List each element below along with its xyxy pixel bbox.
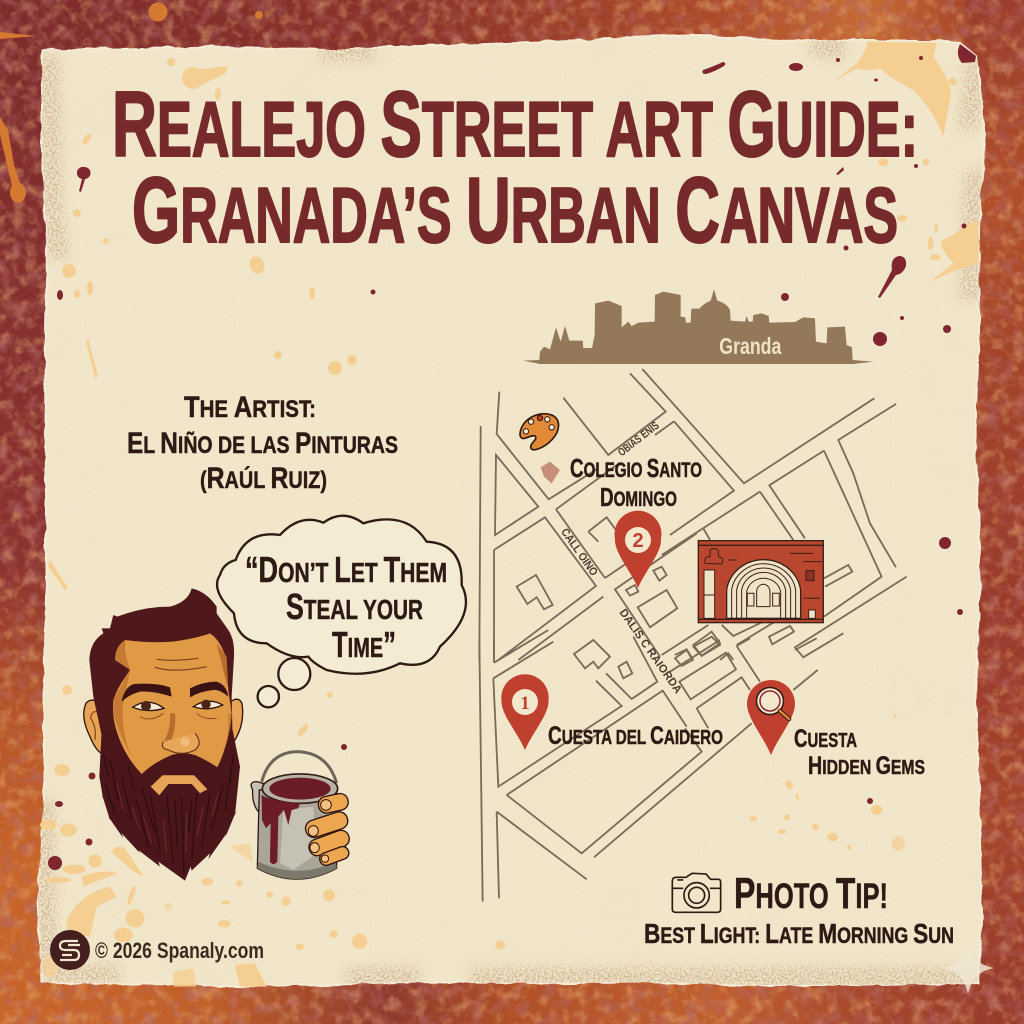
photo tip [644,869,954,949]
top left dots [182,67,204,89]
photo tip: PHOTO TIP! [734,869,888,918]
credit with logo: © 2026 Spanaly.com [95,938,264,963]
sparkle mark [942,944,994,994]
street name labels: CALL OINO [558,526,600,579]
artist heading: THE ARTIST: [184,391,316,424]
label: Cuesta Hidden Gems: CUESTA [794,725,857,753]
icon: faded building mark [541,462,560,483]
label: Cuesta del Caidero: CUESTA DEL CAIDERO [548,722,723,750]
bottom left splash [40,820,367,987]
street name labels: OBIAS ENIS [616,420,662,459]
hair [89,588,234,740]
forehead lines [155,658,207,670]
street map [479,369,907,902]
hand fingers [303,792,352,867]
face shading [113,640,232,767]
pin 1 with label [501,674,723,750]
label: Colegio Santo Domingo: COLEGIO SANTO [570,453,702,483]
paint can held in hand [251,752,352,879]
credit with logo [50,930,264,970]
artist portrait [84,588,243,881]
beard [99,730,240,881]
nose [162,733,199,753]
historic arch illustration [698,541,823,623]
lip and chin tufts [151,775,207,795]
eyes [133,700,223,719]
streets upper [479,369,907,660]
thought bubble with quote: STEAL YOUR [286,586,423,627]
beard strands [103,753,233,873]
pin 3 with magnifier and label [747,680,925,780]
top right splash [833,42,978,282]
thought bubble with quote: “DON’T LET THEM [245,549,447,590]
top right marks [702,62,725,74]
label: Colegio Santo Domingo: DOMINGO [600,482,677,512]
thought bubble with quote [217,516,466,707]
streets lower [479,630,818,902]
skyline label: Granda [719,333,782,359]
Granada skyline [523,289,873,364]
mustache [132,754,230,793]
left drops [77,167,91,192]
street name labels [558,420,684,696]
title [112,72,918,262]
title: REALEJO STREET ART GUIDE: [112,72,918,176]
pin 3 with magnifier and label: HIDDEN GEMS [808,752,925,780]
title: GRANADA’S URBAN CANVAS [132,158,898,262]
pin 1 with label: 1 [520,693,530,714]
artist heading [127,391,398,495]
brows [122,682,228,701]
outer orange drips [0,2,263,203]
thought bubble with quote: TIME” [332,624,396,665]
lower right dots [496,714,905,950]
pin 2: 2 [632,530,644,552]
face [113,633,232,774]
pin 2 [614,511,662,588]
artist heading: EL NIÑO DE LAS PINTURAS [127,427,398,460]
icon: camera [672,873,721,912]
photo tip: BEST LIGHT: LATE MORNING SUN [644,918,954,949]
icon: palette [520,414,559,450]
street name labels: DALIS C RAIORDA [617,607,684,696]
label: Colegio Santo Domingo [570,453,702,512]
ears [84,699,243,755]
artist heading: (RAÚL RUIZ) [200,462,327,495]
